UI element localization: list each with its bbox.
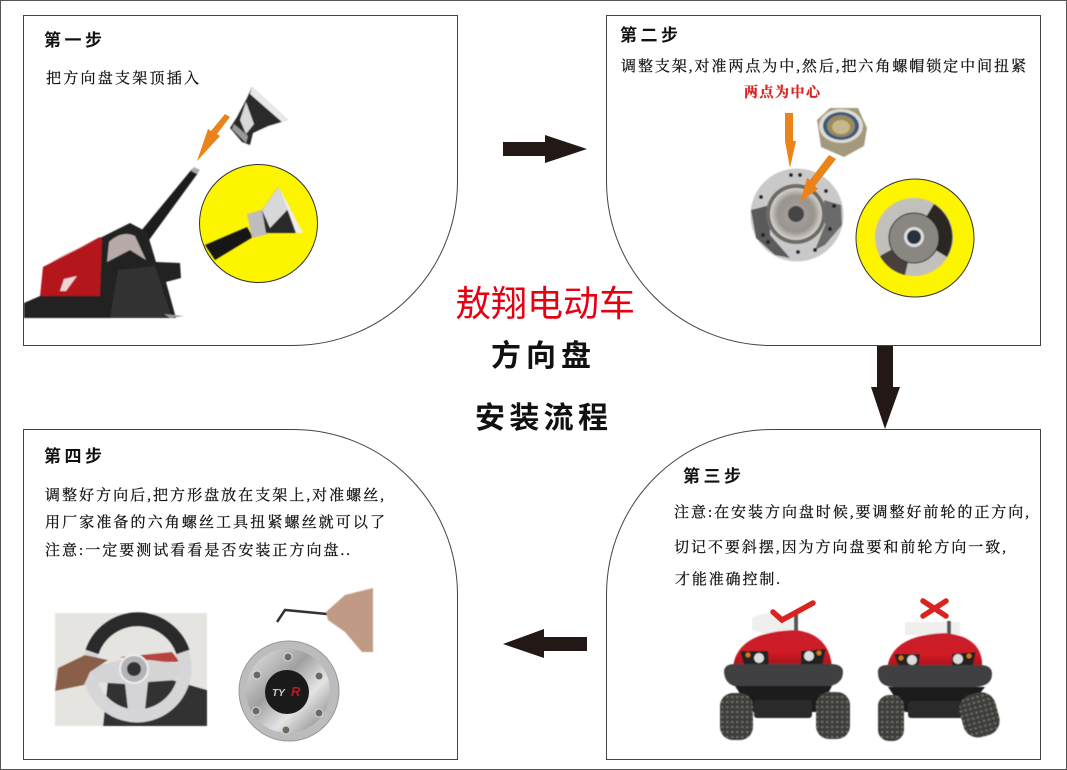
icon: chrome adapter <box>230 87 288 145</box>
arrow: step 2 to step 3 <box>871 346 900 429</box>
subtitle: installation process: 安装流程 <box>475 402 608 435</box>
heading: step 4: 第四步 <box>44 446 102 466</box>
icon: hex nut <box>817 108 867 157</box>
image: steering wheel on stand <box>55 613 207 726</box>
heading: step 2: 第二步 <box>620 25 678 45</box>
text: step 4 instruction <box>45 486 385 559</box>
label: two points centered: 两点为中心 <box>744 84 822 101</box>
arrow: step 3 to step 4 <box>503 629 587 658</box>
heading: step 3: 第三步 <box>683 466 741 486</box>
title: brand name: 敖翔电动车 <box>455 283 635 324</box>
text: step 3 instruction <box>674 503 1029 588</box>
arrow: orange arrow to center <box>800 155 836 202</box>
heading: step 1: 第一步 <box>44 30 102 50</box>
arrow: orange down arrow <box>785 113 796 168</box>
callout: yellow ring detail <box>856 179 974 297</box>
image: hex key and hub cover: TY <box>272 688 286 699</box>
text: step 4 instruction: 调整好方向后,把方形盘放在支架上,对准螺丝, <box>45 486 384 504</box>
text: step 3 instruction: 切记不要斜摆,因为方向盘要和前轮方向一致, <box>674 539 1006 556</box>
image: hex key and hub cover: R <box>291 684 301 699</box>
text: step 2 instruction: 调整支架,对准两点为中,然后,把六角螺帽锁定中间扭紧 <box>621 57 1026 75</box>
arrow: step 1 to step 2 <box>503 135 587 163</box>
image: hex key and hub cover <box>239 588 373 741</box>
icon: red cross mark <box>923 601 946 616</box>
image: steering column and red scooter <box>24 167 200 318</box>
title block <box>455 283 635 435</box>
icon: red check mark <box>773 603 813 620</box>
panel: step 4 <box>24 430 458 760</box>
callout: yellow zoom circle <box>200 164 318 282</box>
text: step 3 instruction: 注意:在安装方向盘时候,要调整好前轮的正方向, <box>674 503 1029 521</box>
image: mounting plate <box>750 168 844 262</box>
panel: step 3 <box>606 430 1040 760</box>
subtitle: steering wheel: 方向盘 <box>491 340 591 373</box>
text: step 1 instruction: 把方向盘支架顶插入 <box>46 69 199 87</box>
image: correct front wheels <box>720 613 850 740</box>
text: step 3 instruction: 才能准确控制. <box>675 571 780 588</box>
text: step 4 instruction: 注意:一定要测试看看是否安装正方向盘.. <box>45 542 350 559</box>
arrow: orange insertion arrow <box>197 114 230 161</box>
image: incorrect front wheels <box>878 621 1003 741</box>
text: step 4 instruction: 用厂家准备的六角螺丝工具扭紧螺丝就可以了 <box>45 513 385 531</box>
